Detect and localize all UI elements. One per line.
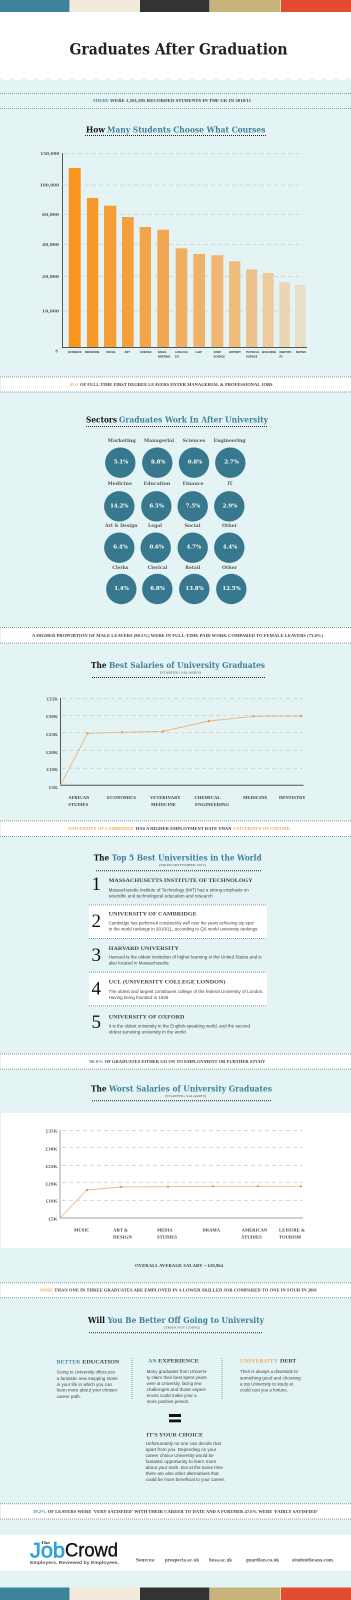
sector bubbles: Clerks (112, 566, 129, 571)
bar chart: students per course: BUILDING (262, 350, 276, 354)
sector bubbles: 5.1% (114, 460, 128, 466)
rank 1: MIT (92, 874, 253, 898)
sector bubbles: Art & Design (104, 524, 138, 529)
stat strip: employment or further study (0, 1054, 351, 1069)
line chart: best salaries: ENGINEERING (195, 802, 230, 807)
rank 1: MIT: 1 (92, 874, 101, 895)
sources: studentbeans.com (292, 1558, 333, 1564)
stat strip: Cambridge vs Oxford: UNIVERSITY OF CAMBRIDGE (68, 826, 134, 831)
bar chart: students per course: DENTIST- (280, 350, 292, 354)
column: better education: learn more about your chosen (57, 1388, 118, 1392)
column: it's your choice: Unfortunately no one can decide that (146, 1441, 222, 1446)
sector bubbles: 7.5% (186, 503, 200, 509)
rank 4: UCL (92, 978, 263, 1000)
stat strip: recorded students: WERE 1,501,295 RECORDED STUDENTS IN THE UK IN 2010/11 (110, 98, 251, 103)
heading: top 5 universities: (FROM SEPTEMBER 2012) (159, 863, 206, 867)
bar chart: students per course: HISTORY (229, 350, 241, 354)
column: university debt: a top University to study at (240, 1382, 294, 1386)
line chart: worst salaries: STUDIES (157, 1234, 178, 1240)
column: better education: career path. (57, 1394, 81, 1399)
stat strip: employment or further study: 80.0% (89, 1059, 104, 1064)
line chart: worst salaries: TOURISM (279, 1234, 302, 1240)
sector bubbles: 0.6% (149, 545, 164, 551)
footer (0, 1535, 351, 1571)
line chart: best salaries: £25K (46, 732, 59, 737)
line chart: best salaries: £35K (46, 696, 59, 702)
column: university debt: UNIVERSITY (240, 1359, 278, 1365)
stat strip: Cambridge vs Oxford: HAS A HIGHER EMPLOYMENT RATE THAN (136, 826, 232, 831)
sector bubbles: Marketing (108, 439, 136, 444)
sector bubbles: 13.8% (185, 586, 204, 592)
logo: The Job Crowd: Employers. Reviewed by Employees. (30, 1560, 119, 1565)
bar chart: students per course: BUSINESS (68, 350, 82, 354)
sector bubbles: Engineering (214, 439, 246, 444)
bar chart: students per course: MEDICINE (85, 350, 100, 354)
bar chart: students per course: SCIENCE (214, 354, 225, 358)
top colour bar (0, 0, 351, 12)
rank 5: Oxford: oldest surviving university in the world (109, 1030, 186, 1034)
column: university debt: something good and choosing (240, 1376, 301, 1380)
sector bubbles: Finance (183, 482, 204, 487)
logo: The Job Crowd: Crowd (65, 1540, 118, 1562)
bar chart: students per course: ART (124, 350, 130, 354)
bar chart: students per course: SCIENCE (246, 354, 258, 358)
line chart: worst salaries (1, 1113, 351, 1248)
rank 2: Cambridge: 2 (92, 911, 101, 932)
line chart: best salaries: MEDICINE (243, 795, 268, 800)
column: university debt: could cost you a fortune. (240, 1388, 288, 1392)
stat strip: satisfaction: OF LEAVERS WERE 'VERY SATISFIED' WITH THEIR CAREER TO DATE AND A FURTHER 47.6% WERE 'FAIRLY SATISFIED' (48, 1509, 318, 1514)
line chart: best salaries: CHEMICAL (194, 795, 220, 800)
rank 2: Cambridge (92, 911, 257, 932)
rank 5: Oxford: 5 (92, 1012, 101, 1033)
bar chart: students per course: 40,000 (42, 242, 59, 247)
bottom colour bar (0, 1588, 351, 1600)
sources (136, 1558, 333, 1564)
stat strip: recorded students: THERE (93, 98, 109, 103)
icon: equals sign (169, 1414, 181, 1422)
rank 1: MIT: scientific and technological education and research (109, 894, 213, 898)
bar chart: students per course: LANGUAG- (175, 350, 189, 354)
bar chart: students per course: 100,000 (40, 182, 59, 188)
sector bubbles (104, 439, 246, 604)
stat strip: lower skilled jobs: THAN ONE IN THREE GRADUATES ARE EMPLOYED IN A LOWER SKILLED JOB COMPARED TO ONE IN FOUR IN 2001 (54, 1288, 317, 1292)
sector bubbles: 8.8% (151, 460, 166, 466)
sector bubbles: Social (184, 524, 201, 529)
sector bubbles: IT (228, 482, 233, 487)
column: it's your choice: apart from you. Depending on your (146, 1447, 217, 1452)
logo: The Job Crowd: Job (30, 1540, 65, 1562)
rank 4: UCL: 4 (92, 978, 102, 1000)
line chart: worst salaries: £10K (46, 1198, 58, 1204)
sector bubbles: 12.5% (222, 586, 241, 592)
heading: top 5 universities: Top 5 Best Universities in the World (112, 852, 262, 862)
heading: courses: Many Students Choose What Courses (107, 124, 266, 134)
stat strip: lower skilled jobs: MORE (40, 1288, 53, 1292)
column: it's your choice (146, 1433, 225, 1482)
line chart: worst salaries: £30K (46, 1146, 58, 1152)
line chart: worst salaries: MEDIA (157, 1228, 173, 1232)
sector bubbles: 2.7% (224, 460, 239, 466)
column: an experience: ences could make your a (147, 1393, 197, 1398)
sector bubbles: 1.4% (114, 586, 129, 592)
bar chart: students per course: 10,000 (42, 308, 59, 314)
bar chart: students per course: SCIENCE (140, 350, 152, 354)
line chart: best salaries: STUDIES (68, 802, 89, 807)
rank 3: Harvard: HARVARD UNIVERSITY (109, 946, 179, 952)
heading: best salaries: The (91, 660, 106, 670)
rank 3: Harvard: 3 (92, 945, 101, 966)
column: an experience (147, 1359, 208, 1404)
sector bubbles: Medicine (108, 482, 132, 487)
column: it's your choice: could be more beneficial to your career. (146, 1477, 225, 1482)
sources: hesa.ac.uk (209, 1558, 233, 1564)
column: better education: Going to University offers you (57, 1370, 116, 1374)
heading: worst salaries: (STARTING SALARIES) (165, 1094, 206, 1098)
column: better education (57, 1359, 119, 1399)
column: an experience: ty claim their best spent years (147, 1375, 207, 1380)
sector bubbles: 4.7% (186, 545, 201, 551)
column: it's your choice: fantastic opportunity to learn more (146, 1459, 217, 1464)
column: better education: BETTER (57, 1359, 81, 1365)
line chart: best salaries: MEDICINE (151, 802, 176, 807)
line chart: worst salaries: STUDIES (242, 1234, 262, 1240)
line chart: worst salaries: £25K (46, 1164, 58, 1169)
sector bubbles: Other (222, 524, 238, 529)
line chart: worst salaries: ART & (113, 1228, 128, 1232)
line chart: worst salaries: DRAMA (202, 1228, 221, 1232)
column: an experience: Many graduates from Universi- (147, 1369, 208, 1374)
stat strip: satisfaction (0, 1504, 351, 1519)
line chart: best salaries (46, 696, 306, 807)
sources: prospects.ac.uk (165, 1558, 200, 1564)
line chart: worst salaries: LEISURE & (279, 1228, 305, 1232)
column: an experience: challenges and those experi- (147, 1387, 207, 1392)
line chart: best salaries: DENTISTRY (279, 795, 306, 800)
bar chart: students per course: NEERING (158, 354, 170, 358)
heading: best salaries (91, 660, 266, 678)
rank 1: MIT: MASSACHUSETTS INSTITUTE OF TECHNOLOGY (109, 878, 253, 884)
rank 4: UCL: The oldest and largest constituent college of the federal University of London. (109, 989, 263, 994)
line chart: best salaries: VETERINARY (150, 795, 181, 800)
title: Graduates After Graduation (70, 40, 288, 58)
bar chart: students per course: ES (175, 354, 179, 358)
line chart: worst salaries: £5K (48, 1216, 58, 1222)
rank 5: Oxford: It is the oldest university in the English-speaking world, and the second (109, 1024, 251, 1028)
heading: top 5 universities: The (94, 852, 109, 862)
stat strip: male vs female leavers (0, 627, 351, 643)
line chart: best salaries: AFRICAN (68, 795, 90, 800)
overall average salary: OVERALL AVERAGE SALARY = £20,964 (135, 1263, 224, 1268)
column: better education: in your life in which you can (57, 1382, 113, 1387)
line chart: best salaries: £20K (46, 750, 59, 755)
rank 2: Cambridge: Cambridge has performed consistently well over the years achieving top spot (109, 920, 255, 926)
bar chart: students per course (40, 151, 307, 358)
column: university debt: Their is always a downside to (240, 1369, 299, 1374)
stat strip: managerial jobs (0, 377, 351, 392)
rank 5: Oxford (92, 1012, 251, 1034)
column: an experience: more positive person. (147, 1399, 190, 1404)
bar chart: students per course: 20,000 (42, 274, 59, 279)
rank 2: Cambridge: UNIVERSITY OF CAMBRIDGE (109, 912, 197, 918)
line chart: best salaries: £30K (46, 714, 59, 719)
sector bubbles: Other (222, 566, 238, 571)
column: better education: a fantastic new stepping stone (57, 1376, 118, 1381)
heading: courses: How (86, 124, 106, 134)
column: university debt (240, 1359, 301, 1392)
column: an experience: AN (148, 1359, 157, 1365)
heading: sectors: Sectors (86, 414, 117, 424)
bar chart: students per course: ENGI- (158, 350, 167, 354)
column: an experience: EXPERIENCE (158, 1359, 199, 1365)
rank 1: MIT: Massachusetts Institute of Technology (MIT) has a strong emphasis on (109, 888, 249, 892)
sector bubbles: 6.4% (113, 545, 128, 551)
bar chart: students per course: 150,000 (40, 151, 59, 156)
heading: better off: (THAN NOT GOING) (164, 1325, 200, 1329)
logo: The Job Crowd (30, 1540, 119, 1565)
heading: worst salaries: The (91, 1083, 106, 1093)
sector bubbles: Legal (148, 524, 162, 529)
rank 4: UCL: Having being founded in 1826 (109, 995, 169, 1000)
sector bubbles: Education (144, 482, 171, 487)
column: it's your choice: career choice University would be (146, 1453, 214, 1458)
column: it's your choice: about your work. But at the same time (146, 1465, 224, 1470)
logo: The Job Crowd: The (41, 1540, 50, 1545)
column: it's your choice: IT'S YOUR CHOICE (146, 1433, 203, 1439)
line chart: worst salaries: MUSIC (74, 1228, 90, 1232)
line chart: best salaries: £10K (46, 767, 59, 772)
rank 3: Harvard: also located in Massachusetts (109, 960, 169, 966)
bar chart: students per course: 60,000 (42, 212, 59, 217)
line chart: best salaries: ECONOMICS (107, 795, 136, 800)
bar chart: students per course: LAW (196, 350, 202, 354)
rank 3: Harvard (92, 945, 262, 966)
line chart: worst salaries: AMERICAN (242, 1228, 268, 1232)
stat strip: employment or further study: OF GRADUATES EITHER GO ON TO EMPLOYMENT OR FURTHER STUDY (105, 1059, 266, 1064)
heading: worst salaries (91, 1083, 272, 1101)
stat strip: satisfaction: 39.2% (33, 1509, 46, 1514)
rank 3: Harvard: Harvard is the oldest institution of higher learning in the United States and is (109, 954, 262, 960)
sources: guardian.co.uk (246, 1558, 280, 1564)
column: it's your choice: there are also other alternatives that (146, 1471, 220, 1476)
stat strip: managerial jobs: 45% (70, 382, 79, 387)
sector bubbles: 6.8% (150, 586, 165, 592)
bar chart: students per course: COMP (214, 350, 221, 354)
line chart: worst salaries: DESIGN (113, 1234, 133, 1240)
heading: sectors (86, 414, 269, 426)
university ranking list (89, 874, 267, 1034)
bar chart: students per course: 0 (56, 348, 58, 354)
stat strip: recorded students (0, 94, 351, 108)
heading: worst salaries: Worst Salaries of University Graduates (108, 1083, 272, 1093)
bar chart: students per course: PHYSICAL (246, 350, 260, 354)
heading: sectors: Graduates Work In After University (119, 414, 269, 424)
stat strip: managerial jobs: OF FULL TIME FIRST DEGREE LEAVERS ENTER MANAGERIAL & PROFESSIONAL JOBS (80, 382, 273, 387)
stat strip: Cambridge vs Oxford (0, 821, 351, 836)
heading: better off: Will (87, 1315, 105, 1325)
stat strip: lower skilled jobs (0, 1283, 351, 1298)
heading: better off: You Be Better Off Going to University (107, 1315, 265, 1325)
sector bubbles: Managerial (144, 439, 174, 444)
stat strip: Cambridge vs Oxford: UNIVERSITY OF OXFORD (233, 826, 290, 831)
column: university debt: DEBT (280, 1359, 297, 1365)
sector bubbles: 0.8% (188, 460, 202, 466)
line chart: best salaries: £5K (49, 785, 59, 790)
bar chart: students per course: MATHS (296, 350, 306, 354)
stat strip: male vs female leavers: A HIGHER PROPORTION OF MALE LEAVERS (80.5%) WERE IN FULL-TIME PAID WORK COMPARED TO FEMALE LEAVERS (73.0%) (32, 633, 324, 638)
column: an experience: were at University, facing new (147, 1381, 203, 1386)
bar chart: students per course: SOCIAL (106, 350, 116, 354)
rank 2: Cambridge: in the world rankings in 2010/11, according to QS world university rankings (109, 926, 257, 932)
sector bubbles: 4.4% (223, 545, 237, 551)
line chart: worst salaries: £20K (46, 1182, 58, 1186)
bar chart: students per course: RY (280, 354, 283, 358)
sector bubbles: 14.2% (110, 503, 128, 509)
heading: best salaries: (STARTING SALARIES) (160, 671, 201, 675)
sector bubbles: Clerical (148, 566, 168, 571)
sources: Sources: (136, 1558, 155, 1564)
column: better education: EDUCATION (82, 1359, 119, 1365)
heading: best salaries: Best Salaries of University Graduates (109, 660, 265, 670)
rank 5: Oxford: UNIVERSITY OF OXFORD (109, 1015, 184, 1021)
rank 4: UCL: UCL (UNIVERSITY COLLEGE LONDON) (109, 979, 226, 986)
line chart: worst salaries: £35K (46, 1128, 58, 1134)
sector bubbles: 2.9% (223, 503, 237, 509)
heading: top 5 universities (94, 852, 262, 871)
heading: better off (87, 1315, 265, 1333)
sector bubbles: Retail (185, 566, 201, 571)
sector bubbles: 6.5% (149, 503, 164, 509)
sector bubbles: Sciences (183, 439, 206, 444)
